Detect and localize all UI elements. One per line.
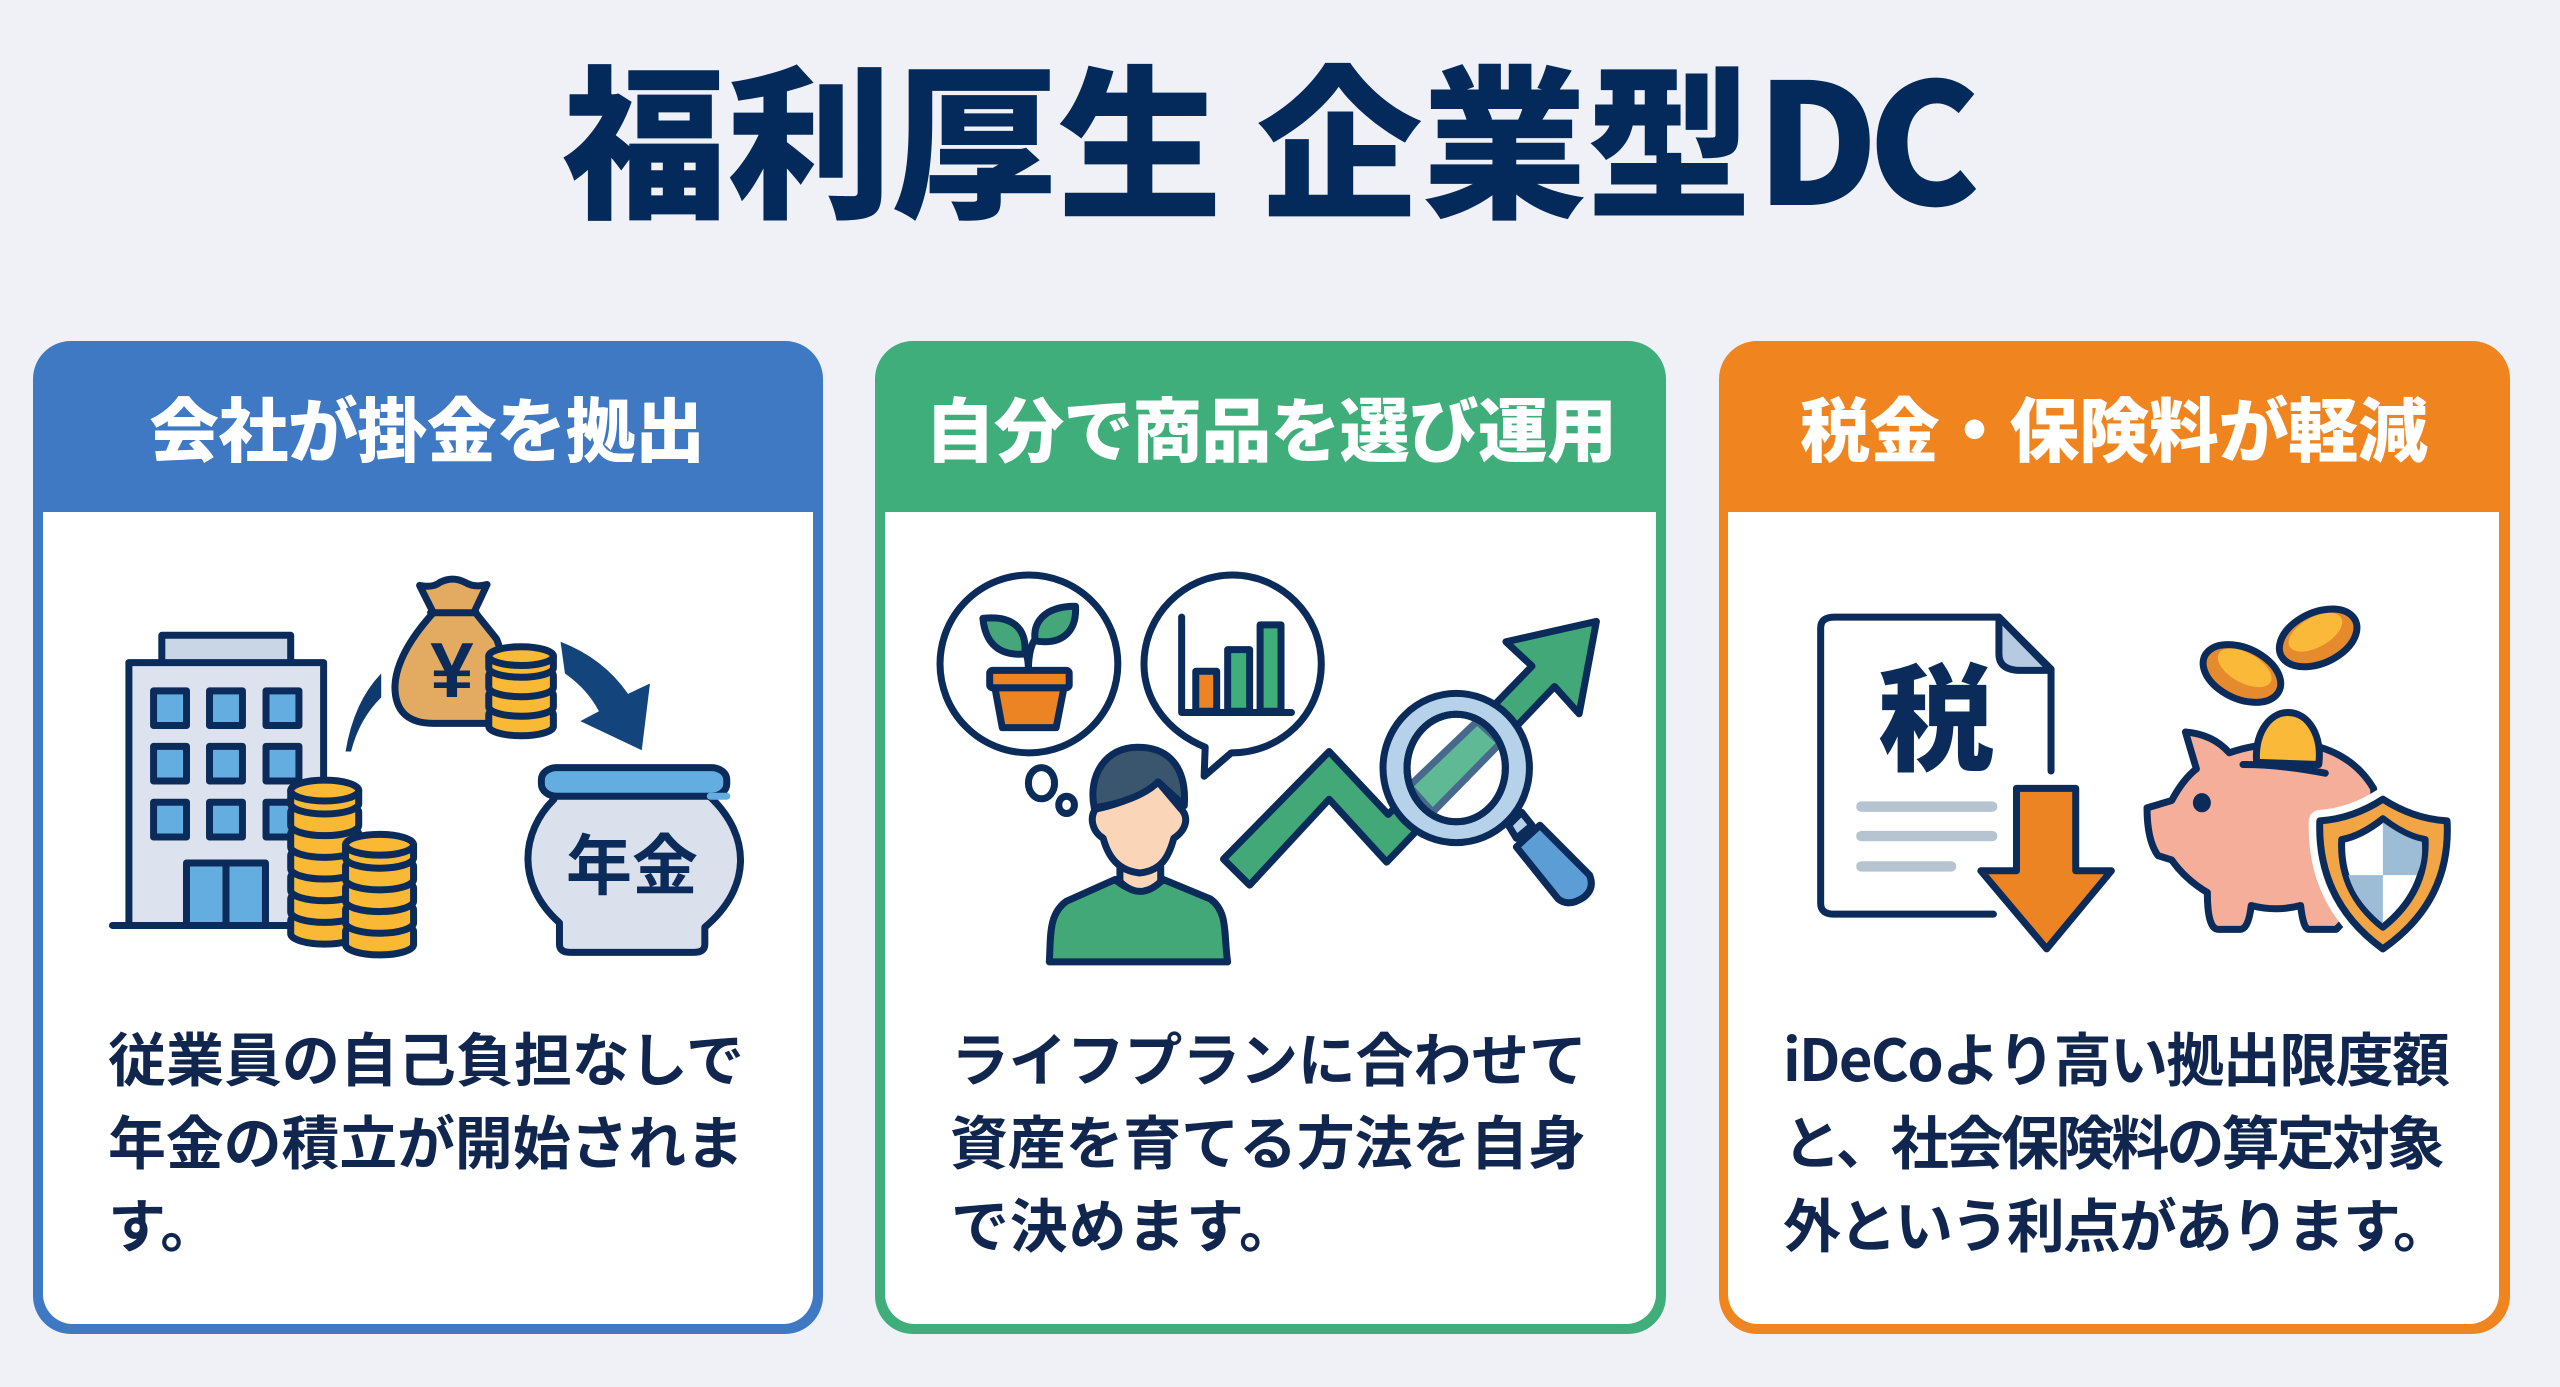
icon: person thinking, growth arrow and magnifier — [940, 575, 1596, 962]
icon: tax document with down arrow — [1821, 617, 2111, 949]
panel: tax and insurance reduction — [1719, 341, 2510, 1334]
icon: piggy bank with coins and shield — [2147, 597, 2447, 949]
heading: company contributions: 会社が掛金を拠出 — [149, 376, 705, 477]
text block: tax and insurance reduction: iDeCoより高い拠出限度額 — [1783, 1014, 2450, 1098]
title: 福利厚生 — [562, 14, 1222, 253]
icon: tax document with down arrow: 税 — [1878, 627, 1994, 795]
text block: choose your own products: 資産を育てる方法を自身 — [950, 1097, 1586, 1181]
text block: tax and insurance reduction: 外という利点があります。 — [1783, 1180, 2451, 1264]
title: 企業型 — [1257, 14, 1752, 253]
text block: choose your own products: ライフプランに合わせて — [951, 1014, 1587, 1098]
text block: choose your own products: で決めます。 — [951, 1180, 1297, 1264]
heading: choose your own products: 自分で商品を選び運用 — [925, 376, 1617, 477]
text block: company contributions: 年金の積立が開始されま — [108, 1097, 744, 1181]
text block: choose your own products — [950, 1014, 1587, 1264]
text block: company contributions: す。 — [108, 1180, 218, 1264]
icon: building, money bag and pension pot — [112, 579, 741, 955]
text block: tax and insurance reduction — [1783, 1014, 2451, 1264]
text block: tax and insurance reduction: と、社会保険料の算定対象 — [1783, 1097, 2445, 1181]
text block: company contributions: 従業員の自己負担なしで — [108, 1014, 744, 1098]
icon: building, money bag and pension pot: 年金 — [566, 813, 698, 909]
heading: tax and insurance reduction: 税金・保険料が軽減 — [1800, 376, 2428, 477]
title: DC — [1756, 11, 1980, 254]
text block: company contributions — [108, 1014, 744, 1264]
panel: company contributions — [33, 341, 823, 1334]
panel: choose your own products — [875, 341, 1666, 1334]
icon: building, money bag and pension pot: ¥ — [430, 626, 474, 714]
